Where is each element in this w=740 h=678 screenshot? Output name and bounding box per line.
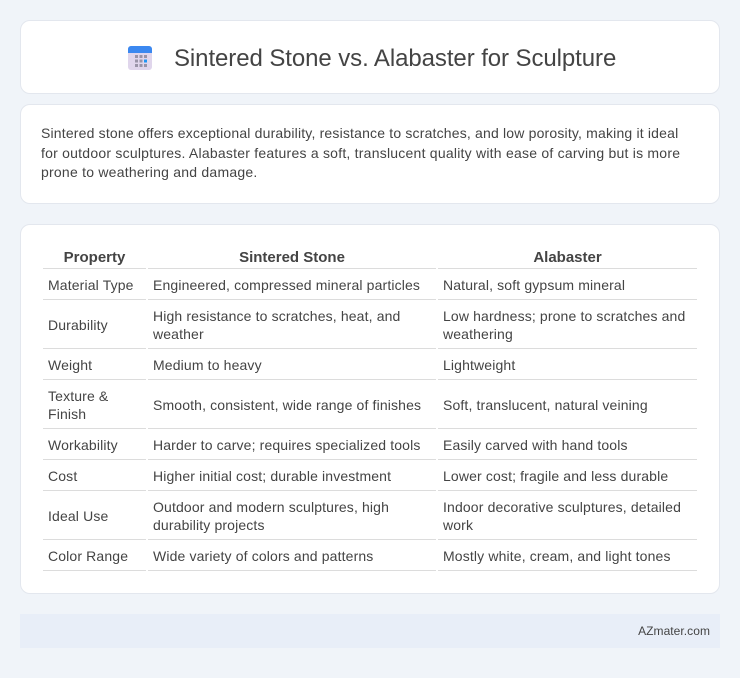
text block: summary: prone to weathering and damage. (41, 164, 258, 180)
row: Ideal Use (48, 499, 681, 533)
row: Material Type: Engineered, compressed mineral particles (153, 277, 420, 293)
row: Color Range: Mostly white, cream, and light tones (443, 548, 671, 564)
footer credit: AZmater.com (638, 624, 710, 638)
row: Ideal Use: durability projects (153, 517, 265, 533)
panel: title card (20, 20, 720, 94)
row: Material Type (48, 277, 625, 293)
row: Texture & Finish: Soft, translucent, natural veining (443, 397, 648, 413)
row: Cost (48, 468, 668, 484)
row: Durability: Low hardness; prone to scratches and (443, 308, 685, 324)
row: Cost: Cost (48, 468, 77, 484)
header: Alabaster: Alabaster (533, 249, 602, 266)
row: Durability: weathering (443, 326, 513, 342)
row: Workability: Harder to carve; requires specialized tools (153, 437, 420, 453)
row: Ideal Use: Indoor decorative sculptures, detailed (443, 499, 681, 515)
row: Ideal Use: work (443, 517, 473, 533)
row: Color Range: Wide variety of colors and patterns (153, 548, 373, 564)
row: Texture & Finish: Texture & (48, 388, 108, 404)
row: Durability (48, 308, 685, 342)
row: Weight: Weight (48, 357, 92, 373)
panel: comparison table (20, 224, 720, 594)
row: Weight: Lightweight (443, 357, 515, 373)
row: Cost: Higher initial cost; durable investment (153, 468, 391, 484)
row: Texture & Finish (48, 388, 648, 422)
row: Ideal Use: Ideal Use (48, 508, 108, 524)
row: Color Range (48, 548, 671, 564)
row: Material Type: Material Type (48, 277, 134, 293)
row: Weight (48, 357, 516, 373)
text block: summary: for outdoor sculptures. Alabaster features a soft, translucent quality with ease of carving but is more (41, 144, 680, 160)
row: Workability: Workability (48, 437, 118, 453)
row: Texture & Finish: Finish (48, 406, 86, 422)
panel: introduction (20, 104, 720, 204)
row: Material Type: Natural, soft gypsum mineral (443, 277, 625, 293)
row: Durability: Durability (48, 317, 108, 333)
row: Workability (48, 437, 628, 453)
row: Weight: Medium to heavy (153, 357, 262, 373)
icon: calendar (128, 46, 152, 70)
row: Ideal Use: Outdoor and modern sculptures, high (153, 499, 389, 515)
header: Sintered Stone: Sintered Stone (239, 249, 345, 266)
row: Color Range: Color Range (48, 548, 128, 564)
row: Workability: Easily carved with hand tools (443, 437, 628, 453)
text block: summary: Sintered stone offers exceptional durability, resistance to scratches, and low porosity, making it ideal (41, 125, 678, 141)
row: Cost: Lower cost; fragile and less durable (443, 468, 668, 484)
row: Durability: High resistance to scratches, heat, and (153, 308, 400, 324)
title: Sintered Stone vs. Alabaster for Sculpture (174, 45, 616, 72)
row: Texture & Finish: Smooth, consistent, wide range of finishes (153, 397, 421, 413)
text block: summary (41, 125, 680, 180)
header: Property: Property (64, 249, 125, 266)
footer bar (20, 614, 720, 648)
row: Durability: weather (153, 326, 204, 342)
